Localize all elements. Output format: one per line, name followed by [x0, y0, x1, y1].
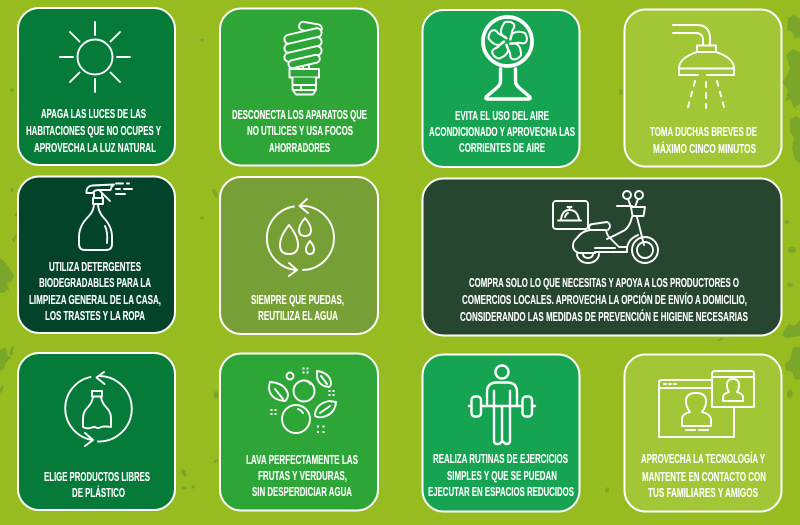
text: LAVA PERFECTAMENTE LAS: [246, 452, 358, 467]
text: [26, 106, 161, 155]
text: EJECUTAR EN ESPACIOS REDUCIDOS: [428, 484, 574, 499]
text: [44, 469, 150, 500]
text: HABITACIONES QUE NO OCUPES Y: [26, 123, 161, 138]
icon: spray bottle: [79, 184, 132, 250]
text: REUTILIZA EL AGUA: [258, 308, 338, 323]
panel: rutinas de ejercicios: [422, 354, 580, 512]
text: CORRIENTES DE AIRE: [459, 140, 545, 155]
icon: sun: [60, 22, 130, 92]
text: FRUTAS Y VERDURAS,: [258, 468, 347, 483]
panel: tecnologia y contacto: [624, 354, 782, 512]
panel: evita el aire acondicionado: [422, 10, 580, 167]
text: BIODEGRADABLES PARA LA: [39, 275, 151, 290]
panel: duchas breves: [624, 10, 782, 166]
text: [650, 124, 757, 156]
icon: delivery scooter: [553, 191, 658, 263]
text: APROVECHA LA LUZ NATURAL: [34, 140, 156, 155]
text: [29, 259, 161, 323]
icon: water cycle: [267, 199, 334, 276]
text: [251, 292, 344, 323]
icon: fan: [483, 17, 532, 99]
text: REALIZA RUTINAS DE EJERCICIOS: [433, 451, 568, 466]
panel: detergentes biodegradables: [18, 176, 175, 333]
panel: reutiliza el agua: [220, 177, 378, 334]
icon: video call windows: [659, 371, 754, 437]
panel: compra local y envio a domicilio: [422, 178, 782, 336]
text: APAGA LAS LUCES DE LAS: [41, 106, 146, 121]
text: LOS TRASTES Y LA ROPA: [45, 308, 145, 323]
icon: bulb: [283, 21, 323, 95]
text: SIN DESPERDICIAR AGUA: [252, 484, 352, 499]
panel: apaga las luces: [18, 8, 175, 165]
icon: fruits and leaves: [269, 371, 336, 433]
text: [246, 452, 358, 499]
text: AHORRADORES: [269, 140, 330, 155]
icon: recycled bottle: [65, 372, 132, 446]
icon: decorative dots: [270, 368, 334, 433]
panel: lava frutas y verduras: [220, 354, 378, 510]
text: SIMPLES Y QUE SE PUEDAN: [447, 468, 557, 483]
panel: libres de plastico: [18, 353, 175, 510]
icon: person lifting weights: [469, 366, 535, 444]
text: [232, 107, 367, 155]
text: UTILIZA DETERGENTES: [49, 259, 141, 274]
text: NO UTILICES Y USA FOCOS: [247, 123, 353, 138]
text: LIMPIEZA GENERAL DE LA CASA,: [29, 292, 161, 307]
text: DE PLÁSTICO: [72, 485, 125, 500]
panel: desconecta los aparatos: [220, 8, 378, 166]
text: ELIGE PRODUCTOS LIBRES: [44, 469, 150, 484]
text: [641, 451, 766, 500]
text: [428, 451, 574, 499]
text: EVITA EL USO DEL AIRE: [455, 108, 549, 123]
icon: shower: [673, 25, 734, 108]
text: [429, 108, 575, 155]
text: DESCONECTA LOS APARATOS QUE: [232, 107, 367, 122]
text: ACONDICIONADO Y APROVECHA LAS: [429, 124, 575, 139]
text: SIEMPRE QUE PUEDAS,: [251, 292, 344, 307]
text: [460, 275, 748, 324]
